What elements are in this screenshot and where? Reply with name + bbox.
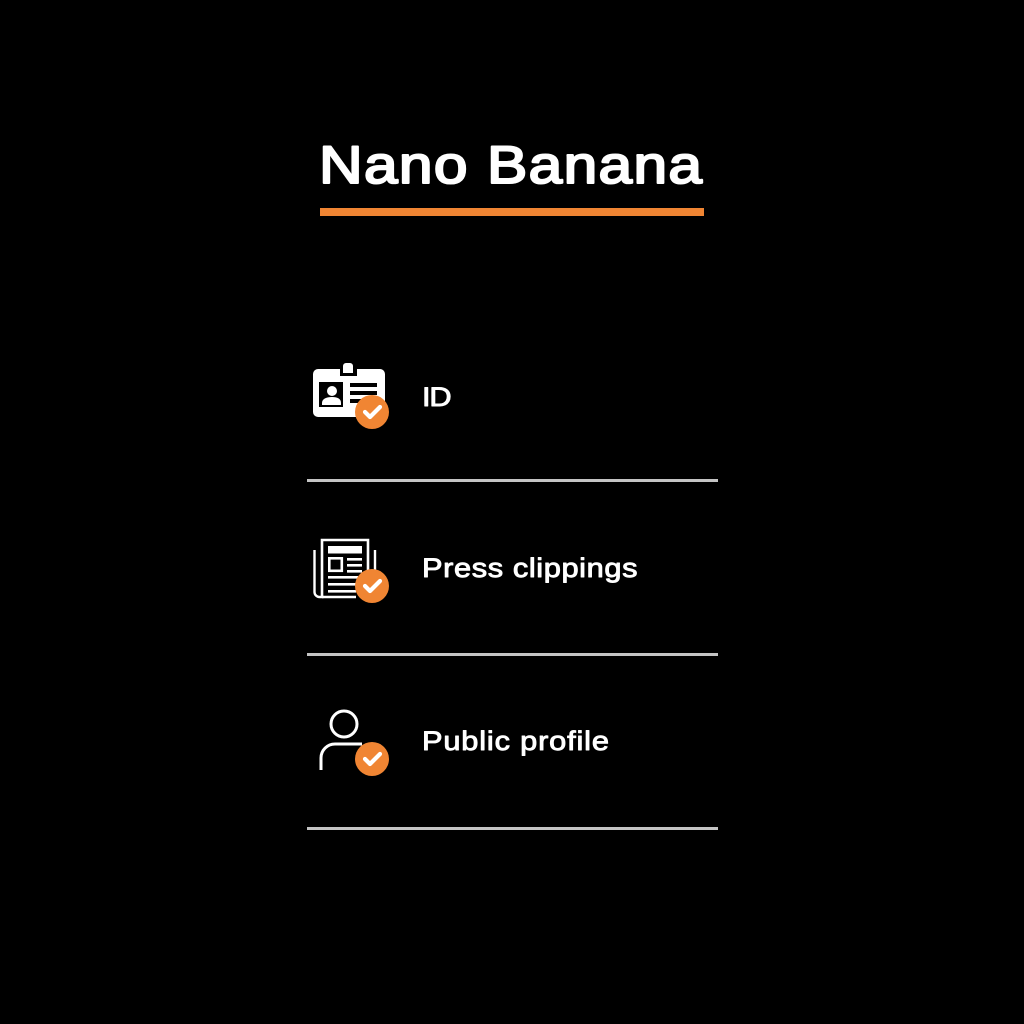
title: Nano Banana <box>319 136 702 195</box>
label: Public profile: Public profile <box>422 727 609 757</box>
label: ID: ID <box>422 383 452 413</box>
icon: person with check <box>321 711 389 776</box>
row: Press clippings <box>314 540 637 603</box>
icon: newspaper with check <box>314 540 389 603</box>
divider 3 <box>307 827 718 830</box>
row: Public profile <box>321 711 609 776</box>
row: ID <box>313 363 452 429</box>
label: Press clippings: Press clippings <box>422 554 637 584</box>
title underline <box>320 208 704 216</box>
icon: ID badge with check <box>313 363 389 429</box>
divider 1 <box>307 479 718 482</box>
divider 2 <box>307 653 718 656</box>
